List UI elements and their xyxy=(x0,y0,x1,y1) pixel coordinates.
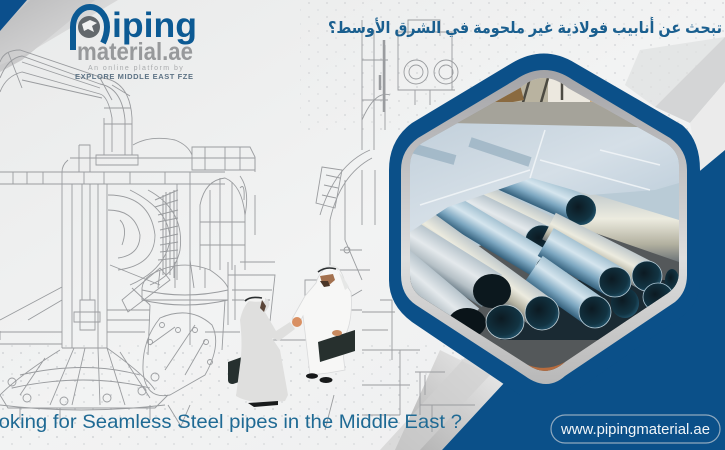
logo xyxy=(73,6,197,81)
logo company name: EXPLORE MIDDLE EAST FZE xyxy=(75,72,193,81)
line drawing: industrial pump and pipework xyxy=(0,20,475,432)
steel pipes photo xyxy=(410,78,679,371)
blue corner panel xyxy=(442,150,725,450)
frame: inner gray ring xyxy=(401,70,687,384)
logo: material.ae: material.ae xyxy=(77,38,193,66)
businessmen shaking hands xyxy=(228,265,355,407)
pill outline xyxy=(551,415,720,443)
frame: outer blue ring xyxy=(389,54,700,395)
logo tagline: An online platform by xyxy=(88,65,184,72)
logo icon: pipe ring P xyxy=(73,7,107,50)
hexagon photo frame xyxy=(389,54,700,384)
logo wordmark: iping xyxy=(112,6,197,45)
website url: www.pipingmaterial.ae xyxy=(560,421,710,438)
corner accent: top left xyxy=(0,0,27,31)
figure: man on right with briefcase xyxy=(292,265,355,383)
pipe bundle xyxy=(410,178,679,340)
figure: man on left with briefcase xyxy=(228,294,295,407)
website pill xyxy=(551,415,720,443)
plastic sheet over pipes xyxy=(405,122,679,232)
